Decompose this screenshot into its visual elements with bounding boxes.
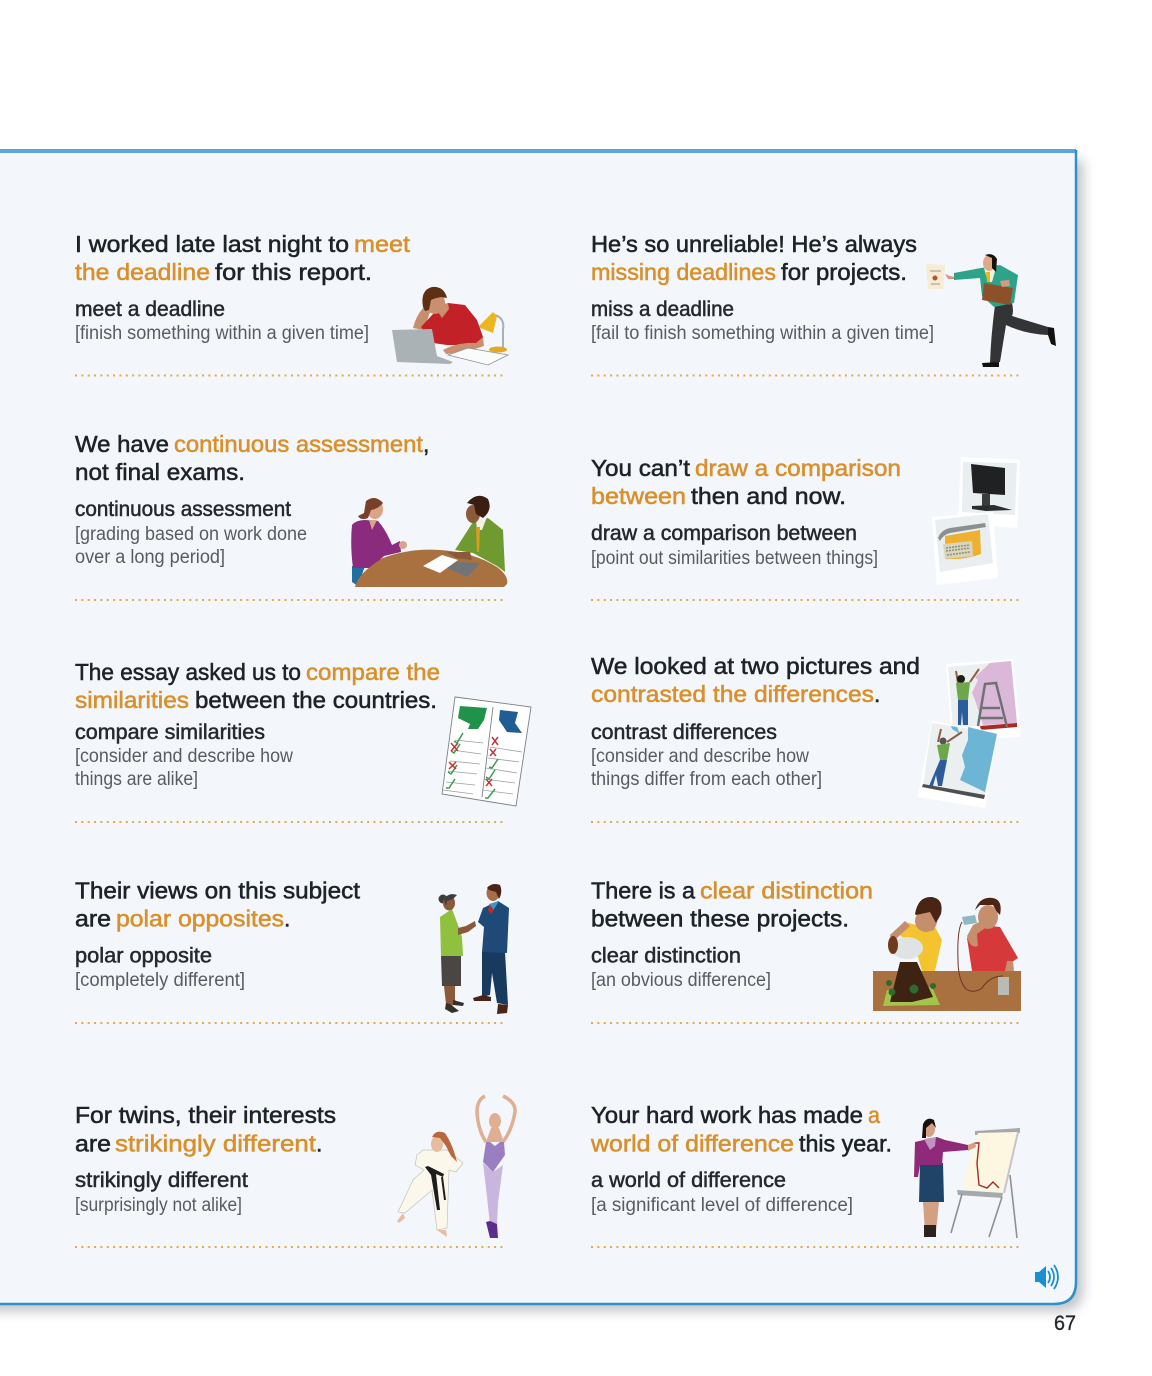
definition: [consider and describe how bbox=[591, 746, 809, 767]
entry: polar opposite bbox=[75, 878, 509, 1023]
page number: 67 bbox=[1054, 1312, 1076, 1335]
heading: strikingly different: strikingly different bbox=[115, 1130, 317, 1156]
definition: [fail to finish something within a given time] bbox=[591, 323, 934, 344]
heading: draw a comparison between: then and now. bbox=[691, 483, 846, 509]
heading: strikingly different: are bbox=[75, 1130, 111, 1156]
heading: strikingly different: For twins, their interests bbox=[75, 1102, 336, 1128]
heading: polar opposites: . bbox=[284, 906, 290, 932]
illustration: woman presenting a chart bbox=[914, 1119, 1020, 1238]
heading: compare the similarities bbox=[75, 659, 440, 713]
heading: compare the similarities: The essay asked us to bbox=[75, 659, 301, 685]
entry: contrast differences bbox=[591, 653, 1021, 822]
term: strikingly different bbox=[75, 1169, 248, 1192]
heading: contrasted the differences: We looked at two pictures and bbox=[591, 653, 920, 679]
heading: continuous assessment bbox=[75, 431, 429, 485]
term: contrast differences bbox=[591, 721, 777, 744]
term: draw a comparison between bbox=[591, 522, 857, 545]
heading: continuous assessment: continuous assessment bbox=[174, 431, 424, 457]
heading: compare the similarities: compare the bbox=[306, 659, 440, 685]
entry: strikingly different bbox=[75, 1096, 515, 1247]
definition: [a significant level of difference] bbox=[591, 1195, 853, 1216]
entry: miss a deadline bbox=[591, 231, 1056, 376]
heading: a world of difference: a bbox=[868, 1102, 880, 1128]
definition: [grading based on work done bbox=[75, 524, 307, 545]
definition: [surprisingly not alike] bbox=[75, 1195, 242, 1216]
heading: contrasted the differences: contrasted the differences bbox=[591, 681, 874, 707]
heading: strikingly different: . bbox=[316, 1130, 322, 1156]
heading: clear distinction: between these projects. bbox=[591, 906, 849, 932]
heading: a world of difference: this year. bbox=[799, 1130, 892, 1156]
entry: continuous assessment bbox=[75, 431, 507, 600]
definition: [completely different] bbox=[75, 970, 245, 991]
illustration: two people at a table bbox=[351, 496, 507, 587]
definition bbox=[75, 524, 307, 568]
heading: a world of difference bbox=[590, 1102, 892, 1156]
heading: contrasted the differences bbox=[591, 653, 920, 707]
icon: audio speaker bbox=[1035, 1265, 1058, 1289]
heading: meet the deadline: the deadline bbox=[75, 259, 210, 285]
heading: clear distinction: There is a bbox=[591, 878, 695, 904]
heading: meet the deadline: for this report. bbox=[215, 259, 372, 285]
entry: meet a deadline bbox=[75, 231, 508, 376]
definition: over a long period] bbox=[75, 547, 225, 568]
term: continuous assessment bbox=[75, 498, 291, 521]
definition: things are alike] bbox=[75, 769, 198, 790]
entry: compare similarities bbox=[75, 659, 531, 822]
heading: missing deadlines: for projects. bbox=[781, 259, 907, 285]
illustration: painter photos bbox=[918, 659, 1021, 808]
heading: missing deadlines bbox=[591, 231, 917, 285]
heading: continuous assessment: We have bbox=[75, 431, 169, 457]
definition bbox=[591, 746, 822, 790]
definition: [an obvious difference] bbox=[591, 970, 771, 991]
heading: polar opposites: polar opposites bbox=[116, 906, 284, 932]
heading: compare the similarities: between the countries. bbox=[195, 687, 437, 713]
entry: a world of difference bbox=[590, 1102, 1021, 1247]
definition bbox=[75, 746, 293, 790]
illustration: comparison checklist bbox=[442, 697, 531, 806]
entry: draw a comparison bbox=[591, 455, 1021, 600]
illustration: karate student and ballet dancer bbox=[397, 1096, 515, 1238]
heading: polar opposites: are bbox=[75, 906, 111, 932]
heading: a world of difference: world of difference bbox=[590, 1130, 794, 1156]
definition: [finish something within a given time] bbox=[75, 323, 369, 344]
heading: continuous assessment: not final exams. bbox=[75, 459, 245, 485]
heading: polar opposites bbox=[75, 878, 361, 932]
term: clear distinction bbox=[591, 944, 741, 968]
illustration: student working late bbox=[392, 287, 508, 365]
heading: polar opposites: Their views on this subject bbox=[75, 878, 361, 904]
heading: clear distinction: clear distinction bbox=[700, 878, 873, 904]
illustration: monitor and typewriter photos bbox=[932, 457, 1020, 585]
heading: draw a comparison between: draw a comparison bbox=[695, 455, 901, 481]
heading: clear distinction bbox=[591, 878, 873, 932]
definition: things differ from each other] bbox=[591, 769, 822, 790]
heading: compare the similarities: similarities bbox=[75, 687, 189, 713]
term: a world of difference bbox=[591, 1169, 786, 1192]
panel: page card bbox=[0, 150, 1083, 1311]
term: meet a deadline bbox=[75, 298, 225, 321]
illustration: two colleagues talking bbox=[438, 884, 509, 1014]
heading: meet the deadline: I worked late last night to bbox=[75, 231, 349, 257]
term: polar opposite bbox=[75, 944, 212, 968]
term: miss a deadline bbox=[591, 298, 734, 321]
heading: continuous assessment: , bbox=[423, 431, 429, 457]
entry: clear distinction bbox=[591, 878, 1021, 1023]
definition: [point out similarities between things] bbox=[591, 548, 878, 569]
heading: a world of difference: Your hard work has made bbox=[591, 1102, 863, 1128]
heading: meet the deadline: meet bbox=[354, 231, 411, 257]
heading: contrasted the differences: . bbox=[874, 681, 880, 707]
heading: missing deadlines: He’s so unreliable! He’s always bbox=[591, 231, 917, 257]
definition: [consider and describe how bbox=[75, 746, 293, 767]
heading: draw a comparison between: between bbox=[591, 483, 686, 509]
heading: meet the deadline bbox=[75, 231, 411, 285]
heading: draw a comparison between bbox=[591, 455, 901, 509]
illustration: two children with science projects bbox=[873, 897, 1021, 1011]
term: compare similarities bbox=[75, 721, 265, 744]
heading: strikingly different bbox=[75, 1102, 336, 1156]
heading: draw a comparison between: You can’t bbox=[591, 455, 691, 481]
heading: missing deadlines: missing deadlines bbox=[591, 259, 776, 285]
illustration: man running after paper bbox=[926, 254, 1056, 367]
